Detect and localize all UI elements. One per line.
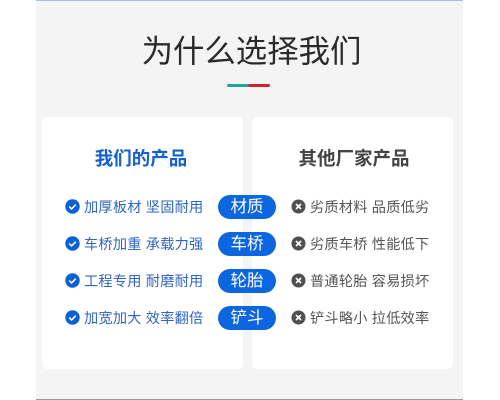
drawback text row 2: 劣质车桥 性能低下: [310, 237, 429, 253]
drawback text row 1: 劣质材料 品质低劣: [310, 200, 429, 216]
panel: other manufacturers: [252, 117, 453, 369]
pill: axle: 车桥: [230, 235, 264, 253]
check icon row 2: [65, 236, 80, 251]
drawback text row 4: 铲斗略小 拉低效率: [310, 311, 429, 327]
check icon row 4: [65, 310, 80, 325]
pill: bucket: 铲斗: [230, 309, 264, 327]
panel: our products: [42, 117, 243, 369]
cross icon row 2: [292, 236, 306, 250]
benefit text row 3: 工程专用 耐磨耐用: [84, 274, 203, 290]
drawback text row 3: 普通轮胎 容易损坏: [310, 274, 429, 290]
pill: tires: [218, 269, 276, 293]
title accent divider: [227, 84, 270, 87]
pill: bucket: [218, 306, 276, 330]
heading: other manufacturers: 其他厂家产品: [298, 148, 410, 169]
pill: material: [218, 195, 276, 219]
check icon row 3: [65, 273, 80, 288]
title: 为什么选择我们: [142, 34, 361, 69]
cross icon row 3: [292, 274, 306, 288]
heading: our products: 我们的产品: [95, 148, 187, 169]
pill: material: 材质: [230, 198, 264, 216]
cross icon row 1: [292, 200, 306, 214]
benefit text row 1: 加厚板材 坚固耐用: [84, 200, 203, 216]
cross icon row 4: [292, 310, 306, 324]
pill: axle: [218, 232, 276, 256]
benefit text row 4: 加宽加大 效率翻倍: [84, 311, 203, 327]
check icon row 1: [65, 199, 80, 214]
pill: tires: 轮胎: [230, 272, 264, 290]
benefit text row 2: 车桥加重 承载力强: [84, 237, 203, 253]
